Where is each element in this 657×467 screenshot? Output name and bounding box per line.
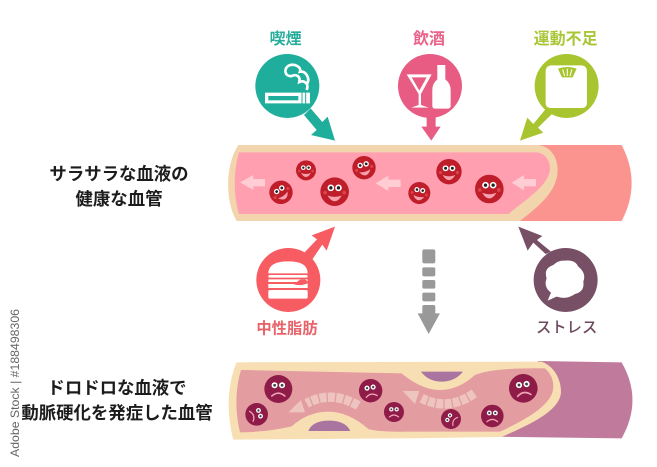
sad blood cell	[437, 405, 465, 433]
red blood cell	[265, 176, 297, 209]
red blood cell	[296, 160, 316, 180]
heading: healthy vessel: 健康な血管	[76, 189, 162, 209]
vessel outer wall	[488, 361, 632, 438]
sad blood cell	[384, 402, 404, 422]
label: triglycerides: 中性脂肪	[256, 319, 318, 337]
red blood cell	[407, 180, 432, 206]
sad blood cell	[242, 400, 271, 429]
plaque top	[421, 372, 463, 382]
label: smoking: 喫煙	[270, 30, 302, 48]
atherosclerotic blood vessel	[229, 361, 632, 440]
icon: cigarette with arrow	[255, 54, 335, 141]
heading: healthy vessel: サラサラな血液の	[49, 164, 189, 184]
label: lack of exercise: 運動不足	[534, 30, 598, 48]
heading: atherosclerotic vessel: ドロドロな血液で	[47, 378, 187, 398]
lower risk factors group	[256, 227, 598, 337]
label: stress: ストレス	[536, 320, 597, 337]
heading: healthy vessel	[49, 164, 189, 209]
sad blood cell	[507, 372, 539, 404]
red blood cell	[436, 159, 462, 184]
sad blood cell	[481, 405, 504, 427]
arrow: progression downward	[418, 249, 440, 334]
flow arrow 2	[376, 176, 401, 191]
label: drinking: 飲酒	[413, 30, 445, 48]
flow arrow 1	[240, 175, 265, 190]
healthy blood vessel	[228, 145, 632, 221]
heading: atherosclerotic vessel: 動脈硬化を発症した血管	[21, 403, 213, 423]
red blood cell	[350, 153, 378, 182]
vessel blood channel	[236, 368, 553, 432]
icon: cocktail and bottle with arrow	[398, 54, 462, 141]
vessel outer wall	[485, 145, 632, 221]
icon: stress speech bubble with arrow	[518, 227, 598, 312]
sad blood cell	[357, 377, 384, 404]
vessel blood channel	[235, 152, 550, 214]
red blood cell	[475, 175, 504, 203]
flow arrow 3	[512, 175, 536, 190]
credit: stock id: Adobe Stock | #188498306	[8, 309, 22, 457]
red blood cell	[320, 177, 349, 206]
plaque bottom	[308, 421, 350, 431]
icon: hamburger with arrow	[256, 227, 335, 312]
sad blood cell	[264, 375, 292, 403]
flow arrow left	[288, 397, 358, 412]
icon: weighing scale with arrow	[520, 54, 599, 141]
top risk factors group	[255, 30, 599, 141]
vessel tan wall	[229, 362, 561, 440]
vessel tan wall	[228, 145, 558, 221]
flow arrow right	[403, 391, 474, 404]
heading: atherosclerotic vessel	[21, 378, 213, 423]
